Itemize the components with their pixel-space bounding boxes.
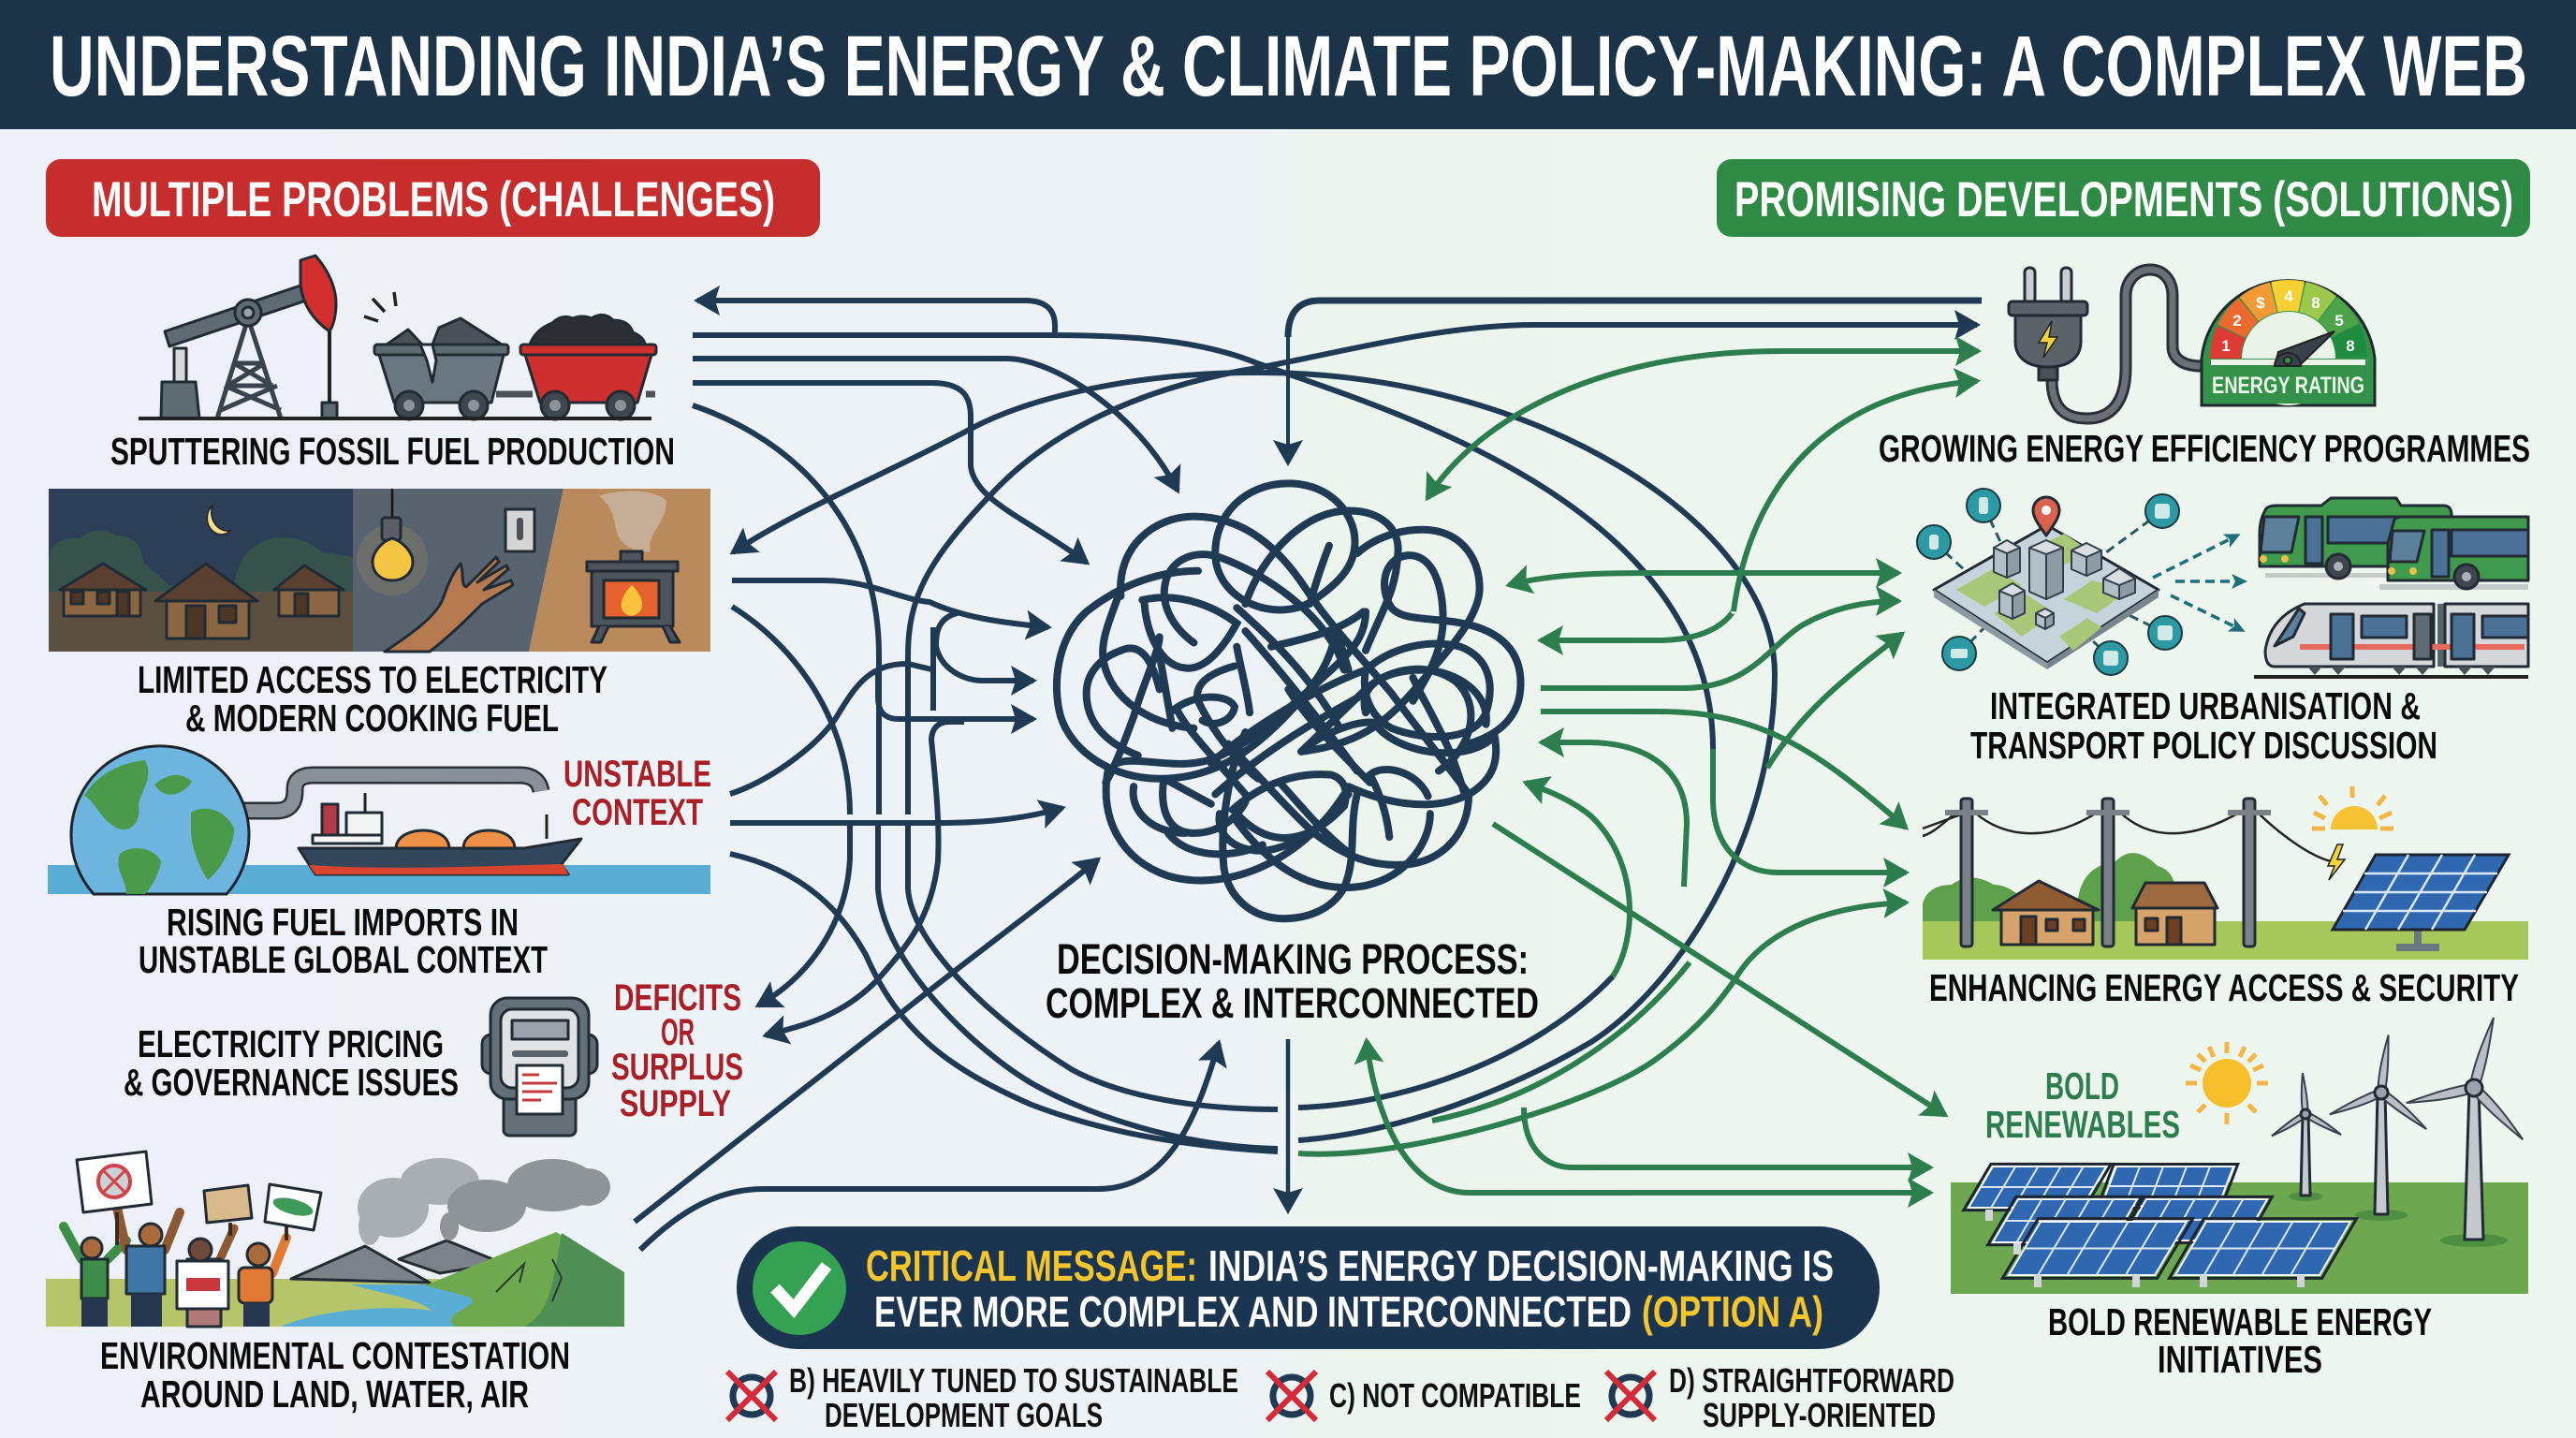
label: bold renewable energy initiatives: INITIATIVES <box>2158 1338 2322 1381</box>
callout: deficits or surplus supply <box>611 977 743 1124</box>
heading: multiple problems <box>46 159 820 237</box>
option B rejected: B) HEAVILY TUNED TO SUSTAINABLE <box>789 1361 1238 1400</box>
plug with cable <box>2009 268 2202 418</box>
coal carts <box>364 292 656 419</box>
callout: unstable context <box>564 754 711 833</box>
icon: plug and energy rating gauge <box>2009 268 2375 418</box>
callout: deficits or surplus supply: SUPPLY <box>620 1083 731 1124</box>
label: bold renewable energy initiatives: BOLD RENEWABLE ENERGY <box>2048 1300 2432 1343</box>
metro train <box>2254 604 2528 677</box>
sun <box>2331 806 2378 829</box>
label: electricity pricing: ELECTRICITY PRICING <box>138 1022 444 1065</box>
gauge: 4 <box>2284 287 2293 305</box>
label: integrated urbanisation: INTEGRATED URBANISATION & <box>1990 684 2421 727</box>
label: environmental contestation <box>100 1334 570 1416</box>
teal location badges <box>1917 489 2182 675</box>
wind turbines <box>2270 1016 2526 1247</box>
option C rejected <box>1267 1372 1581 1420</box>
gauge: 2 <box>2232 312 2242 330</box>
dim room with bulb <box>353 489 564 652</box>
poles and wires <box>1923 799 2331 946</box>
option B rejected: DEVELOPMENT GOALS <box>825 1396 1103 1434</box>
rear bus <box>2260 498 2452 579</box>
label: decision-making process <box>1046 935 1539 1027</box>
illustration: energy access and security <box>1923 786 2528 960</box>
illustration: bold renewable energy <box>1951 1016 2528 1294</box>
village houses <box>1993 881 2217 945</box>
label: decision-making process: DECISION-MAKING PROCESS: <box>1057 935 1529 983</box>
label: rising fuel imports: RISING FUEL IMPORTS IN <box>167 901 519 944</box>
option C rejected: C) NOT COMPATIBLE <box>1329 1376 1581 1415</box>
illustration: limited access panel <box>49 489 710 652</box>
label: limited access to electricity <box>138 658 607 740</box>
callout: critical message: CRITICAL MESSAGE: <box>866 1241 1197 1290</box>
callout: critical message <box>737 1226 1880 1349</box>
option B rejected <box>727 1361 1238 1434</box>
callout: bold renewables <box>1985 1064 2180 1146</box>
icon: electricity meter <box>482 998 597 1136</box>
illustration: integrated urban map <box>1917 489 2182 675</box>
gauge: ENERGY RATING <box>2212 373 2364 399</box>
callout: deficits or surplus supply: OR <box>661 1012 695 1053</box>
oil pump jack <box>161 256 337 418</box>
option D rejected: SUPPLY-ORIENTED <box>1703 1396 1936 1434</box>
label: electricity pricing <box>124 1022 459 1104</box>
callout: unstable context: UNSTABLE <box>564 754 711 795</box>
arrows web <box>635 301 1982 1250</box>
label: electricity pricing: & GOVERNANCE ISSUES <box>124 1061 459 1104</box>
tanker ship <box>299 793 581 874</box>
buildings <box>1994 540 2135 629</box>
pipeline <box>242 775 541 811</box>
protest signs <box>77 1152 321 1245</box>
illustration: fuel imports globe, pipeline and tanker <box>48 746 710 894</box>
option D rejected: D) STRAIGHTFORWARD <box>1669 1361 1954 1400</box>
gauge: $ <box>2256 294 2265 312</box>
callout: deficits or surplus supply: SURPLUS <box>611 1047 743 1088</box>
callout: bold renewables: BOLD <box>2045 1064 2119 1108</box>
callout: critical message: INDIA’S ENERGY DECISION-MAKING IS <box>1208 1241 1834 1290</box>
gauge: 1 <box>2221 337 2231 355</box>
label: integrated urbanisation <box>1970 684 2437 767</box>
gauge: 8 <box>2346 337 2355 355</box>
label: bold renewable energy initiatives <box>2048 1300 2432 1381</box>
central downward arrow <box>1279 1039 1297 1211</box>
label: rising fuel imports: UNSTABLE GLOBAL CONTEXT <box>139 938 548 981</box>
front bus <box>2379 517 2528 590</box>
globe <box>71 746 249 894</box>
night village <box>49 489 353 652</box>
solar panel <box>2333 855 2509 947</box>
label: sputtering fossil fuel production: SPUTTERING FOSSIL FUEL PRODUCTION <box>110 430 675 473</box>
callout: deficits or surplus supply: DEFICITS <box>614 977 741 1019</box>
lightning bolt <box>2328 844 2345 880</box>
protesters <box>64 1208 286 1327</box>
arrows: teal dashed <box>2153 536 2244 630</box>
sun <box>2186 1042 2268 1124</box>
gauge: 8 <box>2311 294 2320 312</box>
label: limited access to electricity: & MODERN COOKING FUEL <box>185 697 559 740</box>
callout: critical message: (OPTION A) <box>1642 1287 1823 1336</box>
solar field <box>1964 1164 2357 1287</box>
wood stove <box>529 489 710 652</box>
tangled decision-making knot <box>1057 483 1521 918</box>
illustration: environmental contestation <box>46 1152 624 1327</box>
callout: unstable context: CONTEXT <box>572 792 703 833</box>
label: decision-making process: COMPLEX & INTERCONNECTED <box>1046 979 1539 1027</box>
callout: critical message: EVER MORE COMPLEX AND INTERCONNECTED <box>874 1287 1632 1336</box>
callout: bold renewables: RENEWABLES <box>1985 1103 2180 1146</box>
smoke clouds <box>358 1158 479 1245</box>
heading: multiple problems: MULTIPLE PROBLEMS (CHALLENGES) <box>92 172 775 227</box>
label: environmental contestation: AROUND LAND, WATER, AIR <box>140 1372 529 1416</box>
heading: promising developments <box>1717 159 2530 237</box>
icon: green check <box>753 1241 846 1335</box>
gauge <box>2202 281 2375 405</box>
label: rising fuel imports <box>139 901 548 981</box>
green arrows <box>1298 351 1978 1193</box>
label: limited access to electricity: LIMITED ACCESS TO ELECTRICITY <box>138 658 607 701</box>
illustration: buses and train <box>2254 498 2528 677</box>
gauge: 5 <box>2334 312 2344 330</box>
illustration: oil pump and coal carts <box>139 256 656 419</box>
dark arrows <box>635 301 1982 1250</box>
option D rejected <box>1606 1361 1954 1434</box>
label: environmental contestation: ENVIRONMENTAL CONTESTATION <box>100 1334 570 1377</box>
